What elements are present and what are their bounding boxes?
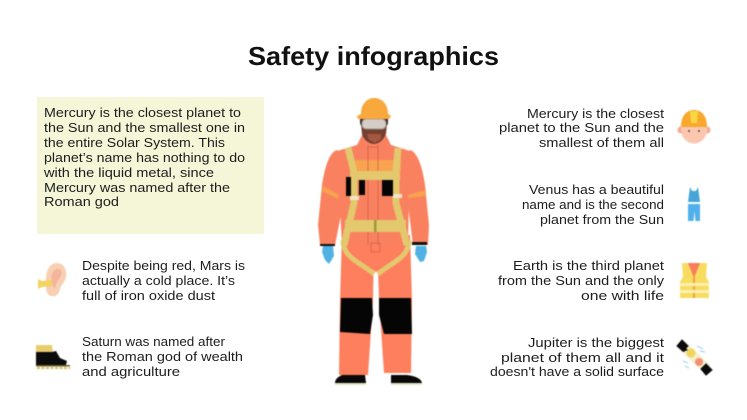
legs <box>339 235 374 375</box>
sleeves <box>318 150 346 245</box>
text: Mars: full of iron oxide dust <box>82 288 215 303</box>
text: Earth: from the Sun and the only <box>498 273 665 288</box>
panel: Mercury description: planet’s name has nothing to do <box>44 150 245 165</box>
panel: Mercury description: with the liquid metal, since <box>43 165 214 180</box>
text: Mars <box>82 258 246 303</box>
icon: blue overalls <box>688 187 700 221</box>
goggles <box>362 119 386 129</box>
icon: safety wristband <box>677 340 712 375</box>
panel: Mercury description: Roman god <box>44 194 119 209</box>
text: Jupiter: Jupiter is the biggest <box>528 335 664 350</box>
text: Earth <box>498 258 665 303</box>
hips <box>342 235 410 272</box>
text: Earth: one with life <box>581 288 664 303</box>
text: Earth: Earth is the third planet <box>513 258 664 273</box>
panel: Mercury description <box>37 97 264 234</box>
central figure: worker in safety gear <box>318 98 429 385</box>
text: Saturn: the Roman god of wealth <box>82 349 243 364</box>
text: Mercury short: smallest of them all <box>539 135 664 150</box>
boots <box>335 375 366 383</box>
text: Venus <box>522 182 664 227</box>
panel: Mercury description: Mercury was named after the <box>44 180 230 195</box>
harness <box>344 148 407 245</box>
knee pads <box>340 298 373 334</box>
text: Venus: name and is the second <box>522 197 664 212</box>
text: Saturn <box>82 334 243 379</box>
text: Saturn: Saturn was named after <box>82 334 226 349</box>
hard hat <box>357 98 391 119</box>
icon: worker face with helmet <box>678 110 710 144</box>
text: Jupiter <box>490 335 664 379</box>
panel: Mercury description: the Sun and the smallest one in <box>44 120 245 135</box>
icon: work boot <box>36 345 70 368</box>
pockets <box>346 177 351 196</box>
text: Venus: Venus has a beautiful <box>529 182 664 197</box>
text: Mercury short: planet to the Sun and the <box>499 120 664 135</box>
text: Jupiter: doesn't have a solid surface <box>490 364 664 379</box>
title: Safety infographics <box>248 41 499 71</box>
icon: high-visibility vest <box>680 263 709 298</box>
zipper lines <box>368 145 378 245</box>
text: Mercury short <box>499 106 664 150</box>
text: Mercury short: Mercury is the closest <box>527 106 664 121</box>
cuffs and gloves <box>320 244 335 246</box>
icon: ear with horn <box>38 263 66 296</box>
text: Mars: actually a cold place. It’s <box>82 273 236 288</box>
panel: Mercury description: Mercury is the closest planet to <box>44 105 241 120</box>
jacket <box>337 135 410 245</box>
buckles <box>350 196 359 200</box>
panel: Mercury description: the entire Solar System. This <box>44 135 226 150</box>
text: Jupiter: planet of them all and it <box>501 350 664 365</box>
shoulder and sleeve bands <box>353 160 401 171</box>
text: Mars: Despite being red, Mars is <box>82 258 246 273</box>
text: Saturn: and agriculture <box>82 364 180 379</box>
hair sides <box>360 116 388 126</box>
beard and neck <box>361 124 387 144</box>
text: Venus: planet from the Sun <box>540 212 664 227</box>
